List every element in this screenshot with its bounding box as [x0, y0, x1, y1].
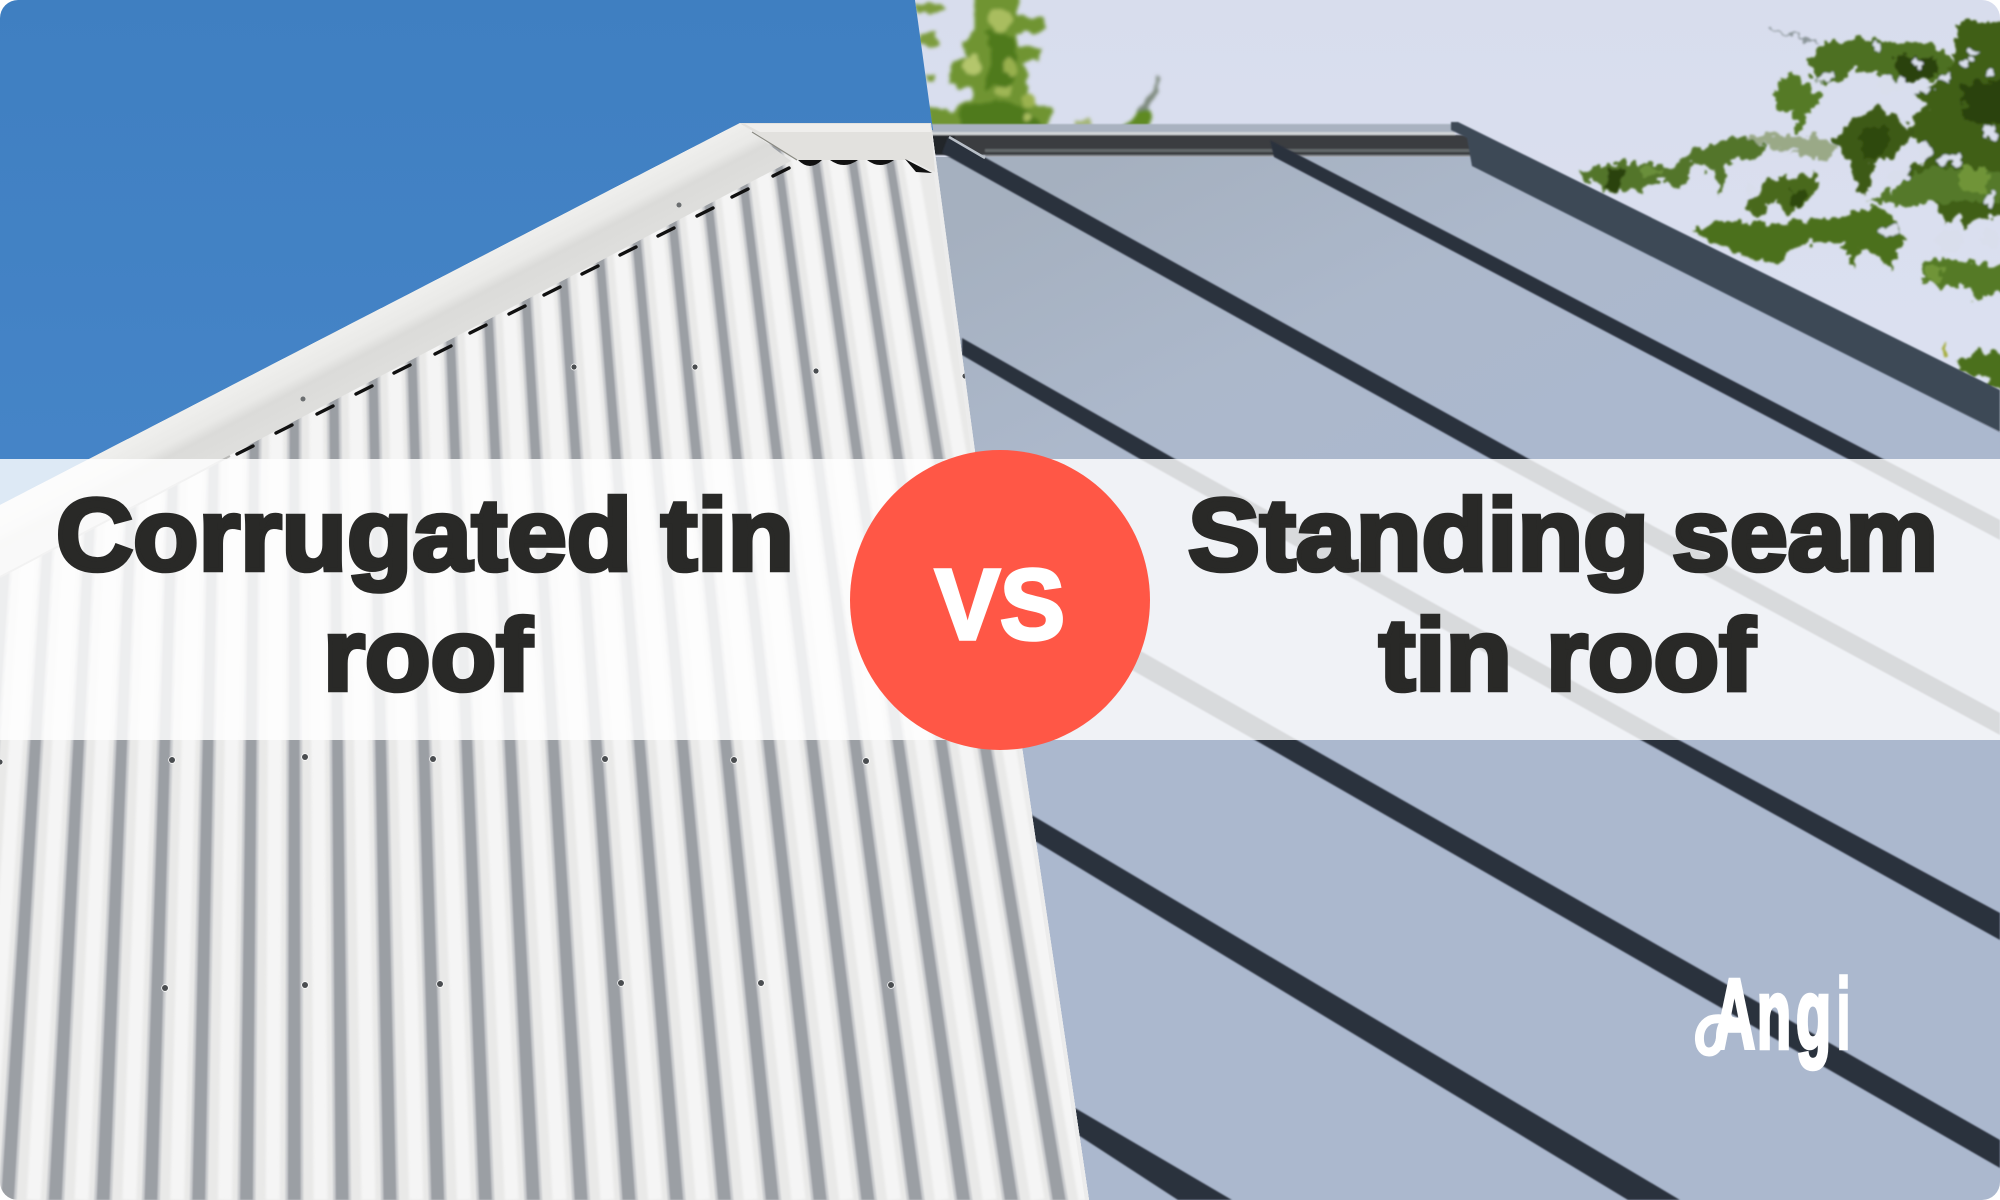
standing seams	[942, 137, 2000, 1200]
logo swoosh	[1699, 1018, 1738, 1052]
ridge cap screws	[300, 396, 306, 402]
seam highlight at ridge	[949, 137, 985, 158]
badge label: VS	[935, 549, 1065, 661]
heading: standing seam tin roof: seam	[1672, 478, 1938, 592]
deep blue sky	[0, 0, 933, 520]
logo: Angi	[1699, 959, 1850, 1069]
heading: standing seam tin roof: roof	[1546, 598, 1756, 712]
heading: corrugated tin roof: tin	[661, 478, 794, 592]
right edge of sheet	[931, 123, 1089, 1200]
foliage: tree at upper right	[1577, 20, 2000, 400]
ridge cap sloped face	[0, 123, 791, 576]
heading: standing seam tin roof: Standing	[1188, 478, 1649, 592]
logo wordmark: g	[1796, 959, 1831, 1069]
gable trim	[1451, 122, 2000, 432]
pale sky background	[915, 0, 2000, 432]
ridge cap	[0, 123, 935, 577]
foliage: tree behind the ridge	[915, 0, 1162, 135]
logo wordmark: A	[1714, 959, 1755, 1069]
logo wordmark: n	[1757, 959, 1791, 1069]
screws	[0, 364, 968, 991]
heading: corrugated tin roof: roof	[323, 598, 533, 712]
ridge flashing: top light bar and dark channel	[925, 124, 1472, 157]
metal panels	[925, 157, 2000, 1200]
sheet base colour	[0, 100, 1100, 1200]
corrugation highlights	[0, 120, 1085, 1200]
panel: standing seam roof photo	[900, 0, 2000, 1200]
badge circle	[850, 450, 1150, 750]
corrugated sheet	[0, 100, 1100, 1200]
card: comparison photo composition: i	[1837, 959, 1850, 1069]
scalloped gaps under ridge cap	[798, 159, 932, 173]
heading: corrugated tin roof: Corrugated	[56, 478, 632, 592]
heading: standing seam tin roof: tin	[1379, 598, 1512, 712]
translucent text band	[0, 459, 2000, 740]
ridge cap top return	[740, 123, 935, 172]
vs badge	[850, 450, 1150, 750]
panel: corrugated roof photo	[0, 0, 1100, 1200]
ridge cap lower seam	[0, 456, 230, 577]
corrugation shadow stripes	[0, 120, 1066, 1200]
ridge cap fold line	[752, 132, 797, 160]
